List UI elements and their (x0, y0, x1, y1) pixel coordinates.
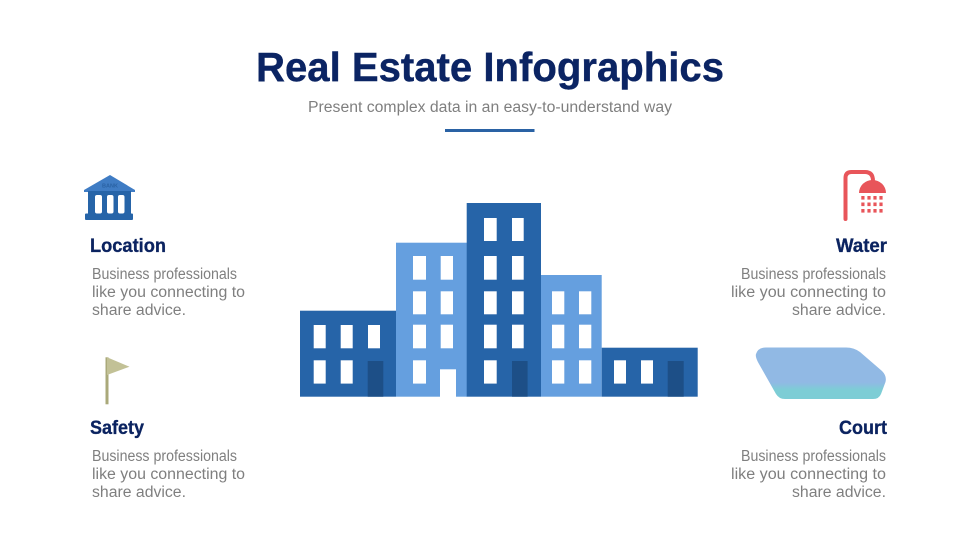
title: Real Estate Infographics (256, 44, 724, 90)
icon: court (756, 348, 886, 399)
heading: court: Court (839, 418, 888, 439)
panel: court (731, 348, 888, 501)
text: water description: Business professionals (741, 266, 886, 283)
text: safety description: share advice. (92, 484, 186, 501)
central building illustration (300, 203, 698, 397)
heading: location: Location (90, 236, 166, 257)
icon: bank (84, 175, 135, 220)
text: court description: Business professionals (741, 448, 886, 465)
text: safety description: Business professionals (92, 448, 237, 465)
panel: safety (90, 357, 245, 501)
text: location description (92, 266, 245, 319)
text: court description: share advice. (792, 484, 886, 501)
icon: shower (846, 172, 886, 219)
text: location description: share advice. (92, 302, 186, 319)
text: court description: like you connecting to (731, 466, 886, 483)
text: location description: Business professionals (92, 266, 237, 283)
panel: location (84, 175, 245, 319)
text: water description (731, 266, 886, 319)
heading: safety: Safety (90, 418, 144, 439)
title underline (445, 129, 534, 132)
heading: water: Water (836, 236, 888, 257)
subtitle: Present complex data in an easy-to-understand way (308, 99, 672, 116)
text: court description (731, 448, 886, 501)
building: tall centre tower (467, 203, 541, 397)
panel: water (731, 172, 888, 319)
icon: flag (106, 357, 130, 404)
text: safety description (92, 448, 245, 501)
building: far right low block (602, 348, 698, 397)
building: light blue mid-right (541, 275, 602, 397)
text: location description: like you connecting to (92, 284, 245, 301)
text: water description: share advice. (792, 302, 886, 319)
icon: bank: BANK (102, 184, 118, 190)
text: safety description: like you connecting to (92, 466, 245, 483)
building: far left low block (300, 311, 396, 397)
building: light blue mid-left (396, 243, 467, 397)
text: water description: like you connecting to (731, 284, 886, 301)
